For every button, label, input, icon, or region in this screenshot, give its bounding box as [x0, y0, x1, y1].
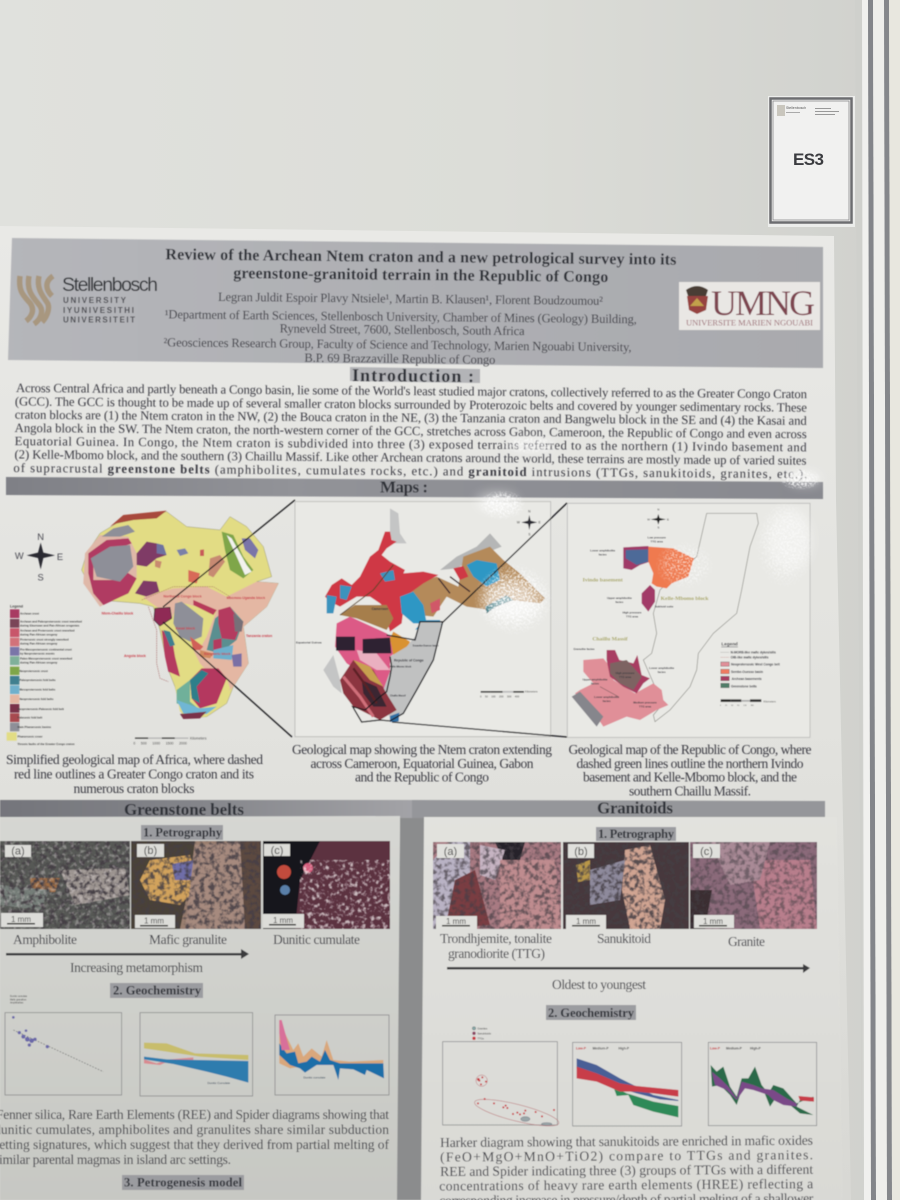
Fenner silica diagram: Dunitic cumulate [10, 995, 28, 998]
craton labels: Angola block [124, 654, 146, 658]
caption: granitoid geochemistry: Harker diagram showing that sanukitoids are enriched in mafic oxides [440, 1133, 813, 1150]
craton labels: Kasai block [176, 626, 195, 630]
rock labels: Granite [728, 934, 765, 949]
introduction text [13, 381, 808, 481]
legend: Neoproterozoic-Paleozoic fold belt [17, 707, 64, 711]
facies labels: Lower amphibolite [594, 695, 620, 699]
facies labels: TTG area [619, 675, 632, 679]
panel: Greenstone belts [0, 816, 400, 1200]
heading band: Greenstone belts: Greenstone belts [124, 800, 244, 819]
legend [721, 642, 781, 688]
caption: granitoid geochemistry: REE and Spider indicating three (3) groups of TTGs with a different [440, 1162, 813, 1180]
Fenner silica diagram: Mafic granulites [10, 998, 27, 1001]
craton labels: Northeast Congo block [163, 595, 202, 599]
REE diagram: Low-P [576, 1046, 587, 1050]
caption: Ntem map: and the Republic of Congo [355, 770, 489, 784]
Ntem map labels: Kelle-Mbomo block [390, 666, 412, 668]
panel: Africa geological map [7, 511, 278, 746]
micrograph: Granite: (c) [700, 846, 713, 858]
facies labels: facies [603, 699, 611, 703]
panel: Republic of Congo geological map [567, 503, 810, 737]
compass rose: W [647, 517, 650, 521]
Ntem map labels [296, 607, 439, 698]
facies labels: facies [599, 552, 607, 556]
arrow label: Oldest to youngest [552, 977, 646, 992]
facies labels: facies [615, 600, 624, 604]
legend: during Pan-African orogeny [20, 642, 58, 646]
heading band: Granitoids: Granitoids [597, 798, 673, 818]
authors and affiliations [163, 289, 637, 368]
title and authors [163, 246, 677, 369]
Harker diagram: Sanukitoids [477, 1031, 492, 1035]
authors and affiliations: Ryneveld Street, 7600, Stellenbosch, South Africa [280, 322, 525, 338]
heading: Geochemistry: 2. Geochemistry [548, 1006, 635, 1020]
facies labels [573, 536, 675, 708]
facies labels: Upper-amphibolite [607, 596, 632, 600]
caption: greenstone geochemistry: setting signatures, which suggest that they derived from partial melting of [0, 1137, 390, 1152]
micrograph: Sanukitoid: (b) [574, 846, 588, 858]
legend: Paleozoic fold belt [17, 716, 42, 720]
Ntem map labels: Equatorial Guinea [296, 640, 322, 644]
header banner [8, 238, 823, 369]
micrograph: amphibolite [0, 841, 130, 929]
legend: Legend [10, 605, 23, 609]
Stellenbosch logo: Stellenbosch [62, 274, 158, 296]
legend: Archean and Proterozoic crust reworked [20, 629, 75, 633]
caption: Africa map [6, 752, 263, 796]
UMNG logo: UMNG [711, 283, 815, 323]
legend: Phanerozoic cover [17, 734, 43, 738]
caption: greenstone geochemistry: dunitic cumulates, amphibolites and granulites share similar subduction [0, 1122, 389, 1137]
caption: greenstone geochemistry: similar parental magmas in island arc settings. [0, 1152, 231, 1167]
display frame rails [855, 0, 900, 1200]
facies labels: Granulite facies [573, 647, 595, 651]
scale bar: Kilometers [763, 699, 777, 703]
compass rose: N [657, 508, 659, 512]
facies labels: TTG area [626, 614, 639, 618]
caption: Congo map [568, 742, 812, 798]
Harker diagram [443, 1026, 561, 1131]
rock labels: Sanukitoid [597, 931, 651, 946]
legend: Greenstone belts [731, 684, 757, 688]
caption: greenstone geochemistry: Fenner silica, Rare Earth Elements (REE) and Spider diagrams showing that [0, 1107, 389, 1122]
REE diagram [140, 1013, 253, 1096]
rock labels: Amphibolite [13, 932, 77, 947]
introduction text: of supracrustal greenstone belts (amphibolites, cumulates rocks, etc.) and granitoid intrusions (TTGs, sanukitoids, granites, etc.). [13, 461, 807, 481]
scale bar [720, 699, 777, 707]
caption: Congo map: southern Chaillu Massif. [629, 784, 751, 798]
heading: Petrography: 1. Petrography [143, 826, 223, 840]
map of the Ntem craton [323, 508, 545, 722]
block labels [583, 577, 709, 642]
arrow: increasing metamorphism [6, 949, 249, 959]
room sign ES3: Stellenbosch [786, 106, 806, 110]
heading band: Greenstone belts [0, 800, 412, 819]
micrograph: dunitic cumulate [263, 841, 390, 929]
rock labels: Trondhjemite, tonalite [440, 931, 552, 946]
heading band: Maps: Maps : [380, 478, 428, 496]
facies labels: Lower amphibolite [649, 666, 675, 670]
Spider diagram: Medium-P [726, 1046, 743, 1050]
legend: Paleoproterozoic fold belts [19, 678, 56, 682]
micrograph: dunitic cumulate: 1 mm [273, 916, 293, 925]
caption: Ntem map: across Cameroon, Equatorial Guinea, Gabon [310, 756, 534, 771]
heading band: Maps [6, 477, 823, 499]
legend: during Eburnean and Pan-African orogenies [20, 623, 80, 627]
craton labels: Bangwelu block [204, 652, 231, 656]
scale bar: 0 500 1000 1500 2000 [133, 741, 187, 745]
legend: N-MORB-like mafic dykes/sills [731, 651, 776, 655]
facies labels: facies [658, 670, 666, 674]
caption: Africa map: red line outlines a Greater Congo craton and its [14, 766, 254, 782]
map of Africa [82, 511, 278, 719]
micrograph: TTG [433, 842, 561, 929]
caption: Africa map: Simplified geological map of Africa, where dashed [6, 752, 263, 767]
rock labels: granodiorite (TTG) [448, 946, 545, 961]
REE diagram: Medium-P [593, 1046, 609, 1050]
rock labels: Dunitic cumulate [273, 932, 360, 947]
compass rose: N [37, 532, 44, 542]
legend: Archean crust [20, 612, 39, 616]
facies labels: High pressure [615, 671, 635, 675]
caption: granitoid geochemistry: concentrations of heavy rare earth elements (HREE) reflecting a [439, 1176, 813, 1195]
caption: granitoid geochemistry: (FeO+MgO+MnO+TiO2) compare to TTGs and granites. [440, 1147, 813, 1165]
REE diagram: High-P [618, 1046, 630, 1050]
rock labels [440, 931, 765, 961]
room sign ES3: ES3 [793, 150, 824, 169]
UMNG logo [679, 282, 820, 330]
arrow: oldest to youngest [447, 964, 810, 973]
panel: Ntem craton geological map [295, 502, 551, 737]
Spider diagram: Dunitic cumulate [303, 1076, 326, 1080]
heading: Introduction: Introduction : [352, 365, 474, 386]
micrograph: TTG: (a) [444, 846, 457, 858]
heading: Geochemistry: 2. Geochemistry [113, 984, 202, 998]
legend: during Pan-African orogeny [20, 633, 58, 637]
caption: Congo map: dashed green lines outline the northern Ivindo [576, 756, 804, 771]
legend: Main Phanerozoic basins [17, 725, 52, 729]
block labels: Ivindo basement [583, 577, 623, 583]
scale bar: 0 25 50 90 120 180 [720, 705, 755, 707]
Fenner silica diagram: Amphibolites [10, 1002, 24, 1005]
compass rose [517, 510, 542, 536]
compass rose [647, 508, 669, 529]
caption: Congo map: Geological map of the Republic of Congo, where [568, 742, 812, 757]
Ntem map labels: Chaillu Massif [390, 696, 406, 698]
caption: greenstone geochemistry [0, 1107, 390, 1167]
zoom lines between maps [163, 500, 567, 737]
micrograph: Granite: 1 mm [703, 917, 723, 926]
scale bar: Kilometers [525, 690, 538, 694]
legend: Neoproterozoic crust [19, 669, 48, 673]
micrograph: TTG: 1 mm [446, 917, 466, 926]
facies labels: Sukitoid suite [655, 604, 674, 608]
poster title: greenstone-granitoid terrain in the Republic of Congo [233, 265, 608, 286]
authors and affiliations: ²Geosciences Research Group, Faculty of Science and Technology, Marien Ngouabi University, [163, 335, 632, 354]
legend: Pre-Mesoproterozoic continental crust [20, 647, 72, 651]
compass rose: W [517, 521, 521, 525]
compass rose: E [539, 521, 542, 525]
heading band: Granitoids [412, 798, 825, 818]
REE diagram [573, 1042, 682, 1126]
Ntem map labels: Souanke-Ouesso basin [413, 646, 439, 648]
introduction text: (GCC). The GCC is thought to be made up of several smaller craton blocks surrounded by Proterozoic belts and covered by younger sedimentary rocks. These [15, 394, 807, 415]
compass rose: S [38, 573, 44, 583]
introduction text: (2) Kelle-Mbomo block, and the southern (3) Chaillu Massif. Like other Archean cratons around the world, these terrains are mostly made up of varied suites [14, 447, 807, 468]
facies labels: TTG area [639, 704, 652, 708]
charts: granitoid geochemistry [443, 1026, 817, 1131]
Stellenbosch logo: UNIVERSITEIT [63, 316, 135, 324]
legend: Neoproterozoic West Congo belt [731, 663, 781, 667]
compass rose: E [667, 517, 669, 521]
legend: Sembe-Ouesso basin [731, 670, 763, 674]
introduction text: Equatorial Guinea. In Congo, the Ntem craton is subdivided into three (3) exposed terrains referred to as the northern (1) Ivindo basement and [15, 434, 807, 454]
UMNG logo: UNIVERSITE MARIEN NGOUABI [686, 318, 813, 328]
poster sheet [0, 226, 851, 1200]
caption: Africa map: numerous craton blocks [74, 781, 194, 796]
legend: Archean and Paleoproterozoic crust reworked [20, 619, 82, 623]
compass rose: E [57, 552, 63, 562]
legend: Paleo-Mesoproterozoic crust reworked [20, 657, 72, 661]
Spider diagram [275, 1015, 389, 1095]
compass rose: S [657, 525, 659, 529]
legend: Neoproterozoic fold belts [19, 697, 54, 701]
legend: during Pan-African orogeny [20, 661, 58, 665]
Fenner silica diagram [5, 995, 122, 1095]
gap between lower panels [396, 815, 426, 1200]
scale bar: 0 50 100 200 300 400 [480, 694, 520, 698]
micrograph: amphibolite: (a) [11, 846, 25, 858]
legend [7, 605, 82, 746]
micrograph: Sanukitoid: 1 mm [576, 917, 596, 926]
Harker diagram: Granites [477, 1026, 488, 1030]
Stellenbosch logo: IYUNIVESITHI [63, 306, 134, 315]
rock labels: Mafic granulite [149, 932, 227, 947]
Stellenbosch logo [20, 274, 158, 324]
compass rose: S [528, 532, 531, 536]
legend: Proterozoic crust strongly reworked [20, 638, 69, 642]
sparkle highlights on laminate [474, 436, 822, 636]
panel: Granitoids [421, 817, 843, 1200]
craton labels: Tanzania craton [246, 634, 272, 638]
map of Congo [572, 513, 758, 727]
authors and affiliations: ¹Department of Earth Sciences, Stellenbosch University, Chamber of Mines (Geology) Building, [165, 307, 637, 326]
heading: Petrography: 1. Petrography [598, 827, 675, 841]
light glare on laminate [477, 439, 821, 620]
introduction text: craton blocks are (1) the Ntem craton in the NW, (2) the Bouca craton in the NE, (3) the Tanzania craton and Bangwelu block in the SE and (4) the Kasai and [15, 408, 808, 428]
block labels: Kelle-Mbomo block [661, 596, 709, 602]
craton labels [102, 595, 272, 658]
Ntem map labels: Republic of Congo [394, 658, 424, 662]
legend: Thrusts faults of the Greater Congo craton [17, 742, 75, 746]
legend: Legend [721, 642, 738, 647]
rock labels [13, 932, 360, 947]
facies labels: facies [591, 682, 599, 686]
micrograph: dunitic cumulate: (c) [271, 845, 283, 857]
legend: Archean basements [732, 677, 762, 681]
micrograph: Sanukitoid [563, 842, 689, 929]
facies labels: Low pressure [647, 536, 666, 540]
micrograph: Granite [690, 842, 817, 929]
micrograph: mafic granulite [131, 841, 261, 929]
legend: OIB-like mafic dykes/sills [731, 656, 769, 660]
facies labels: TTG area [651, 540, 663, 544]
poster title [165, 246, 677, 287]
craton labels: Mbomou-Uganda block [227, 596, 265, 600]
scale bar [133, 736, 207, 745]
poster title: Review of the Archean Ntem craton and a new petrological survey into its [165, 246, 677, 269]
Spider diagram: High-P [750, 1046, 761, 1050]
compass rose [15, 532, 63, 583]
micrograph: mafic granulite: (b) [144, 845, 157, 857]
micrograph: mafic granulite: 1 mm [144, 916, 164, 926]
legend: Mesoproterozoic fold belts [19, 688, 56, 692]
block labels: Chaillu Massif [592, 636, 628, 642]
scale bar [480, 690, 538, 698]
caption: Congo map: basement and Kelle-Mbomo block, and the [583, 770, 797, 784]
caption: Ntem map [292, 742, 552, 784]
facies labels: Upper-amphibolite [583, 678, 608, 682]
Stellenbosch logo: UNIVERSITY [63, 296, 127, 305]
facies labels: Lower amphibolite [590, 548, 616, 552]
room sign ES3 [768, 96, 855, 227]
legend: by Neoproterozoic events [20, 651, 55, 655]
Ntem map labels: Cameroon [372, 607, 388, 611]
scale bar: Kilometers [190, 736, 207, 740]
charts: greenstone geochemistry [5, 995, 389, 1096]
REE diagram: Dunitic Cumulate [207, 1081, 230, 1085]
Spider diagram [708, 1042, 817, 1126]
introduction text: Angola block in the SW. The Ntem craton, the north-western corner of the GCC, stretches across Gabon, Cameroon, the Republic of Congo and even across [15, 421, 807, 441]
heading: Petrogenesis model: 3. Petrogenesis model [124, 1176, 242, 1190]
craton labels: Ntem-Chaillu block [102, 611, 133, 615]
authors and affiliations: B.P. 69 Brazzaville Republic of Congo [304, 351, 495, 367]
facies labels: Medium pressure [633, 700, 657, 704]
compass rose: N [528, 510, 531, 514]
Spider diagram: Low-P [710, 1046, 721, 1050]
Harker diagram: TTGs [477, 1036, 485, 1040]
micrograph: amphibolite: 1 mm [11, 915, 31, 924]
introduction text: Across Central Africa and partly beneath a Congo basin, lie some of the World's least studied major cratons, collectively referred to as the Greater Congo Craton [16, 381, 808, 401]
facies labels: High pressure [622, 610, 642, 614]
arrow label: Increasing metamorphism [70, 960, 203, 975]
caption: granitoid geochemistry [439, 1133, 814, 1200]
authors and affiliations: Legran Juldit Espoir Plavy Ntsiele¹, Martin B. Klausen¹, Florent Boudzoumou² [218, 290, 603, 308]
caption: Ntem map: Geological map showing the Ntem craton extending [292, 742, 552, 757]
compass rose: W [15, 551, 24, 561]
